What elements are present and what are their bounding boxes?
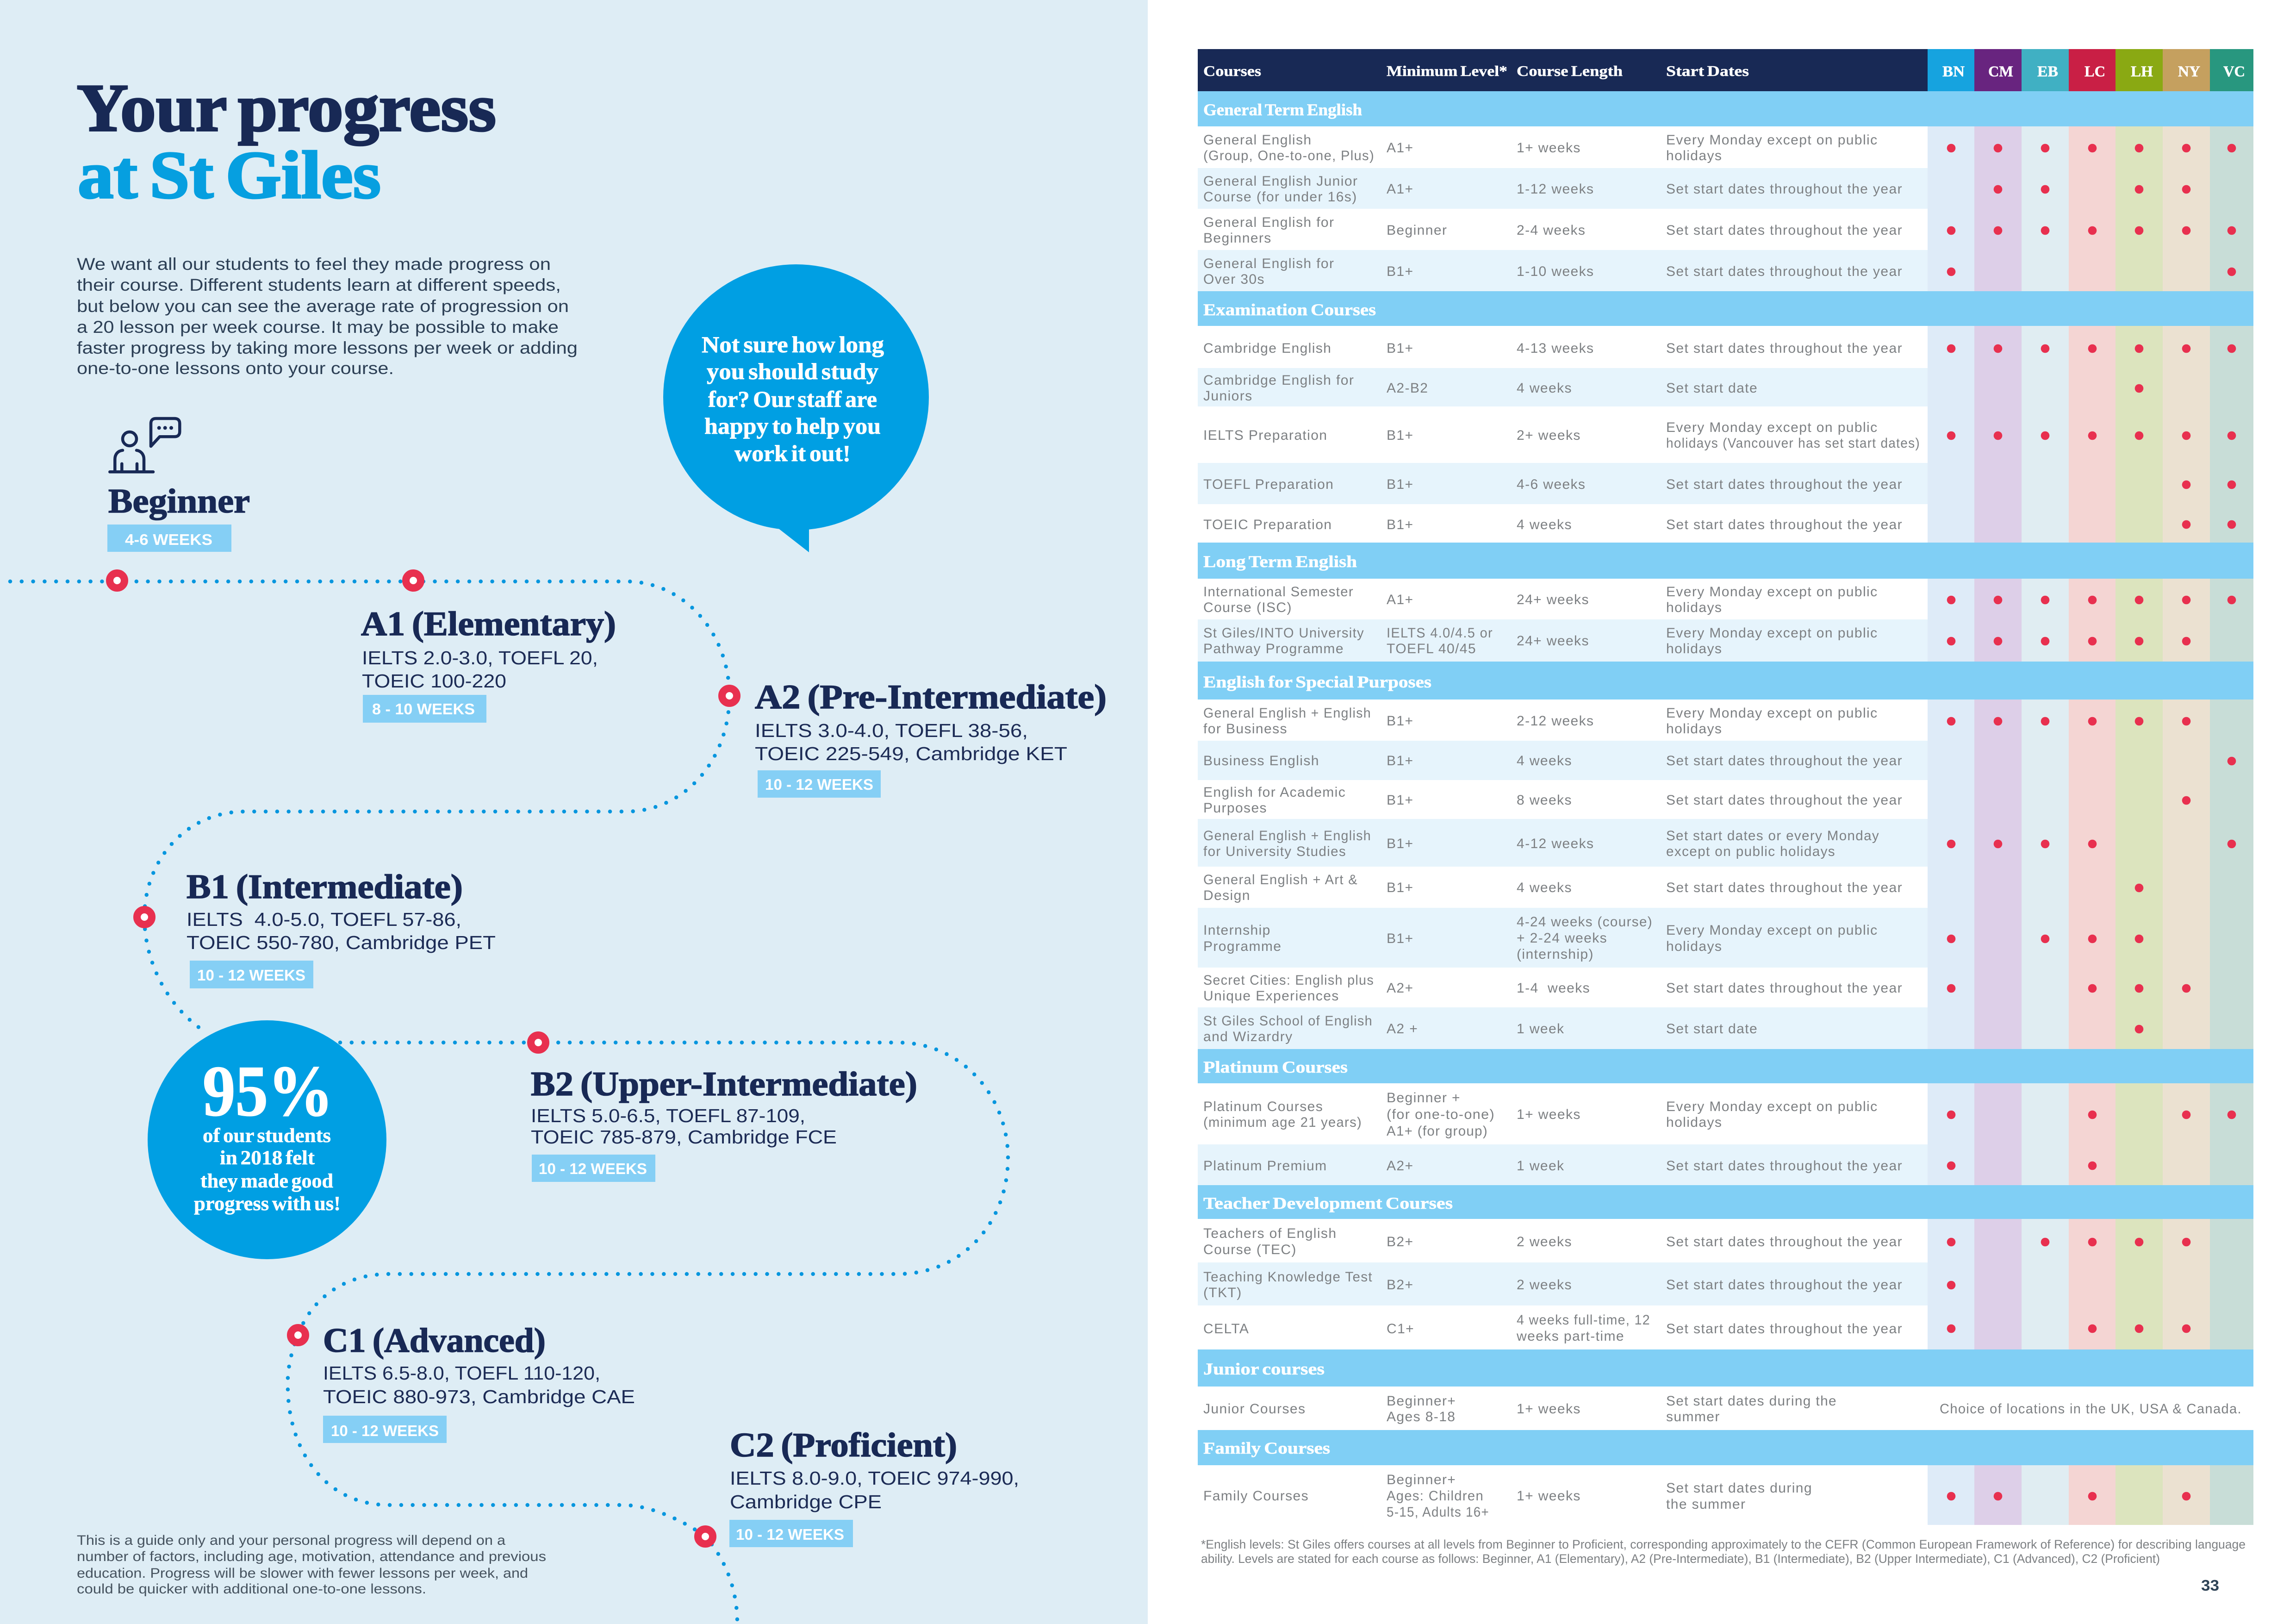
row: General English + English for Business [1198, 700, 2190, 741]
row: General English + Art & Design [1198, 867, 2143, 908]
row: Family Courses: the summer [1666, 1497, 1746, 1512]
table header: VC [2223, 63, 2245, 80]
section band: Junior courses: Junior courses [1203, 1360, 1325, 1378]
row: Internship Programme: + 2-24 weeks [1517, 931, 1607, 946]
level: A1 Elementary: 8 - 10 WEEKS [372, 700, 475, 718]
row: Internship Programme: B1+ [1387, 931, 1413, 946]
level: A1 Elementary: IELTS 2.0-3.0, TOEFL 20, [362, 647, 598, 668]
progress path: dotted line [10, 581, 1008, 1623]
level: C2 Proficient: Cambridge CPE [730, 1491, 882, 1512]
row: General English + English for University Studies: General English + English [1203, 828, 1371, 843]
stat circle: 95%: 95% [203, 1051, 333, 1131]
row: General English Junior Course: Set start dates throughout the year [1666, 181, 1903, 197]
row: General English: A1+ [1387, 140, 1413, 156]
row: TOEIC Preparation [1198, 504, 2236, 543]
row: General English + English for University Studies: B1+ [1387, 836, 1413, 851]
row: General English for Over 30s: Set start dates throughout the year [1666, 264, 1903, 279]
row: General English + English for University Studies [1198, 819, 2236, 867]
row: International Semester Course: 24+ weeks [1517, 592, 1589, 607]
row: TOEIC Preparation: B1+ [1387, 517, 1413, 532]
row: International Semester Course: International Semester [1203, 584, 1354, 600]
row: Internship Programme: 4-24 weeks (course) [1517, 914, 1653, 930]
row: Junior Courses: summer [1666, 1409, 1720, 1424]
row: Family Courses: Beginner+ [1387, 1472, 1456, 1487]
callout: speech bubble: Not sure how long [702, 331, 884, 357]
level: B1 Intermediate: IELTS 4.0-5.0, TOEFL 57-86, [187, 909, 461, 930]
row: Secret Cities [1198, 968, 2190, 1007]
row: General English Junior Course: Course (for under 16s) [1203, 189, 1357, 205]
row: St Giles School of English and Wizardry: St Giles School of English [1203, 1013, 1373, 1029]
stat circle: 95%: of our students [203, 1125, 331, 1147]
row: CELTA [1198, 1305, 2190, 1349]
row: St Giles School of English and Wizardry: and Wizardry [1203, 1029, 1293, 1044]
table header: LC [2084, 63, 2105, 80]
section band: English for Special Purposes [1198, 662, 2253, 700]
row: IELTS Preparation: 2+ weeks [1517, 428, 1581, 443]
row: Secret Cities: Set start dates throughout the year [1666, 981, 1903, 996]
row: Teaching Knowledge Test: (TKT) [1203, 1285, 1242, 1300]
row: TOEFL Preparation: B1+ [1387, 477, 1413, 492]
row: St Giles/INTO University Pathway Programme: 24+ weeks [1517, 633, 1589, 649]
row: General English for Beginners: 2-4 weeks [1517, 223, 1586, 238]
row: General English + English for Business: B1+ [1387, 713, 1413, 729]
row: TOEIC Preparation: TOEIC Preparation [1203, 517, 1332, 532]
level: C1 Advanced: TOEIC 880-973, Cambridge CAE [323, 1386, 635, 1407]
row: General English + English for Business: for Business [1203, 721, 1288, 737]
intro paragraph: but below you can see the average rate of progression on [77, 297, 569, 316]
table header: Courses [1203, 62, 1261, 79]
row: International Semester Course: Course (ISC) [1203, 600, 1292, 615]
row: Teaching Knowledge Test [1198, 1262, 1955, 1305]
callout: speech bubble: you should study [707, 358, 878, 384]
table header: EB [2037, 63, 2058, 80]
level: A2 Pre-Intermediate: TOEIC 225-549, Cambridge KET [755, 743, 1067, 764]
row: Platinum Courses: A1+ (for group) [1387, 1124, 1488, 1139]
title [77, 70, 496, 212]
panel: your progress at St Giles [0, 0, 1148, 1624]
intro paragraph: their course. Different students learn at different speeds, [77, 275, 561, 294]
row: Teachers of English Course: Course (TEC) [1203, 1242, 1297, 1257]
level: B2 Upper-Intermediate: B2 (Upper-Intermediate) [531, 1065, 917, 1103]
row: General English + English for University Studies: Set start dates or every Monday [1666, 828, 1879, 843]
row: TOEFL Preparation [1198, 463, 2236, 504]
row: English for Academic Purposes: 8 weeks [1517, 793, 1572, 808]
row: Family Courses: Family Courses [1203, 1488, 1309, 1504]
level: C2 Proficient [698, 1426, 1019, 1547]
level: B1 Intermediate: 10 - 12 WEEKS [197, 967, 305, 984]
row: General English for Over 30s: 1-10 weeks [1517, 264, 1594, 279]
row: General English for Over 30s: Over 30s [1203, 272, 1265, 287]
level: B2 Upper-Intermediate: 10 - 12 WEEKS [539, 1160, 647, 1177]
row: Platinum Courses: (minimum age 21 years) [1203, 1115, 1362, 1130]
callout: speech bubble: for? Our staff are [708, 386, 877, 412]
row: Cambridge English: Cambridge English [1203, 341, 1332, 356]
level: C1 Advanced: IELTS 6.5-8.0, TOEFL 110-120, [323, 1362, 600, 1384]
row: Teaching Knowledge Test: Set start dates throughout the year [1666, 1277, 1903, 1293]
table header: Course Length [1517, 62, 1623, 79]
row: St Giles School of English and Wizardry [1198, 1007, 2143, 1049]
row: English for Academic Purposes: B1+ [1387, 793, 1413, 808]
row: General English + Art & Design: General English + Art & [1203, 872, 1358, 887]
row: TOEFL Preparation: Set start dates throughout the year [1666, 477, 1903, 492]
row: General English for Beginners: General English for [1203, 215, 1334, 230]
level: B1 Intermediate [137, 868, 496, 988]
row: Cambridge English: 4-13 weeks [1517, 341, 1594, 356]
row: Business English: Business English [1203, 753, 1319, 768]
row: Teachers of English Course: 2 weeks [1517, 1234, 1572, 1249]
section band: General Term English: General Term English [1203, 100, 1362, 119]
row: General English + English for Business: holidays [1666, 721, 1722, 737]
row: Platinum Courses [1198, 1083, 2236, 1144]
row: International Semester Course [1198, 579, 2236, 619]
row: Cambridge English for Juniors: 4 weeks [1517, 381, 1572, 396]
row: St Giles/INTO University Pathway Programme: TOEFL 40/45 [1387, 641, 1476, 656]
level: A2 Pre-Intermediate: A2 (Pre-Intermediate) [755, 678, 1107, 716]
row: International Semester Course: A1+ [1387, 592, 1413, 607]
table header: Start Dates [1666, 62, 1749, 79]
table header: CM [1988, 63, 2013, 80]
row: Internship Programme: Every Monday except on public [1666, 923, 1878, 938]
row: English for Academic Purposes: Set start dates throughout the year [1666, 793, 1903, 808]
stat circle: 95%: progress with us! [194, 1193, 341, 1215]
row: Junior Courses: Beginner+ [1387, 1393, 1456, 1409]
row: General English + Art & Design: B1+ [1387, 880, 1413, 895]
row: General English + Art & Design: Design [1203, 888, 1251, 903]
row: Teachers of English Course [1198, 1219, 2190, 1262]
section band: Teacher Development Courses: Teacher Development Courses [1203, 1194, 1453, 1212]
level: Beginner [107, 482, 250, 588]
row: TOEFL Preparation: TOEFL Preparation [1203, 477, 1334, 492]
row: General English for Over 30s [1198, 250, 2236, 291]
level: A1 Elementary: A1 (Elementary) [361, 605, 616, 643]
row: Internship Programme: Programme [1203, 939, 1282, 954]
section band: Family Courses [1198, 1430, 2253, 1465]
title: Your progress [77, 70, 496, 145]
row: CELTA: CELTA [1203, 1321, 1249, 1337]
row: Junior Courses: Set start dates during the [1666, 1393, 1837, 1409]
row: Cambridge English: Set start dates throughout the year [1666, 341, 1903, 356]
row: Platinum Premium [1198, 1144, 2097, 1185]
row: St Giles/INTO University Pathway Programme: Pathway Programme [1203, 641, 1344, 656]
row: Internship Programme: (internship) [1517, 947, 1594, 962]
row: TOEFL Preparation: 4-6 weeks [1517, 477, 1586, 492]
intro paragraph: We want all our students to feel they made progress on [77, 255, 551, 274]
row: General English Junior Course [1198, 168, 2190, 209]
row: Internship Programme [1198, 908, 2143, 968]
level: C1 Advanced [291, 1322, 635, 1443]
row: Secret Cities: Secret Cities: English plus [1203, 973, 1374, 988]
level: C1 Advanced: 10 - 12 WEEKS [331, 1422, 439, 1439]
row: Family Courses: Ages: Children [1387, 1488, 1484, 1504]
footnote: English levels: *English levels: St Giles offers courses at all levels from Beginner to Proficient, corresponding approximately to the CEFR (Common European Framework of Reference) for describing language [1201, 1537, 2246, 1551]
page number: 33 [2201, 1577, 2219, 1594]
row: Secret Cities: Unique Experiences [1203, 988, 1339, 1004]
row: Internship Programme: Internship [1203, 923, 1271, 938]
row: General English + Art & Design: Set start dates throughout the year [1666, 880, 1903, 895]
level: Beginner: Beginner [108, 482, 250, 520]
row: Platinum Courses: 1+ weeks [1517, 1107, 1581, 1122]
stat circle: 95% [148, 1020, 386, 1259]
level: C2 Proficient: 10 - 12 WEEKS [736, 1526, 844, 1543]
row: CELTA: C1+ [1387, 1321, 1414, 1337]
location column tints [1928, 91, 2253, 1525]
table header: LH [2131, 63, 2153, 80]
row: St Giles School of English and Wizardry: 1 week [1517, 1021, 1564, 1037]
level: A1 Elementary: TOEIC 100-220 [362, 670, 506, 692]
row: St Giles/INTO University Pathway Programme: St Giles/INTO University [1203, 625, 1364, 641]
section band: General Term English [1198, 91, 2253, 126]
row: General English [1198, 126, 2236, 168]
row: St Giles School of English and Wizardry: Set start date [1666, 1021, 1758, 1037]
row: General English + English for University Studies: except on public holidays [1666, 844, 1836, 859]
section band: Platinum Courses: Platinum Courses [1203, 1058, 1348, 1076]
row: Secret Cities: A2+ [1387, 981, 1413, 996]
row: Cambridge English for Juniors: A2-B2 [1387, 381, 1428, 396]
intro paragraph: one-to-one lessons onto your course. [77, 359, 394, 378]
level: B1 Intermediate: B1 (Intermediate) [187, 868, 463, 906]
row: Platinum Courses: Beginner + [1387, 1090, 1461, 1106]
intro paragraph: faster progress by taking more lessons per week or adding [77, 338, 578, 357]
title: at St Giles [78, 137, 381, 212]
row: TOEIC Preparation: 4 weeks [1517, 517, 1572, 532]
level: C1 Advanced: C1 (Advanced) [323, 1322, 546, 1360]
row: Teaching Knowledge Test: Teaching Knowledge Test [1203, 1269, 1373, 1285]
level: A2 Pre-Intermediate: IELTS 3.0-4.0, TOEFL 38-56, [755, 720, 1028, 741]
row: General English Junior Course: General English Junior [1203, 174, 1358, 189]
row: General English + English for Business: 2-12 weeks [1517, 713, 1594, 729]
section band: Examination Courses [1198, 291, 2253, 326]
row: Junior Courses: 1+ weeks [1517, 1401, 1581, 1417]
row: General English for Beginners: Set start dates throughout the year [1666, 223, 1903, 238]
row: General English: holidays [1666, 148, 1722, 163]
row: Internship Programme: holidays [1666, 939, 1722, 954]
row: Platinum Premium: Platinum Premium [1203, 1158, 1327, 1174]
row: Junior Courses: Ages 8-18 [1387, 1409, 1456, 1424]
row: St Giles School of English and Wizardry: A2 + [1387, 1021, 1418, 1037]
row: General English for Beginners: Beginner [1387, 223, 1447, 238]
row: St Giles/INTO University Pathway Programme [1198, 619, 2190, 662]
panel: course table [1198, 49, 2253, 1594]
row: Platinum Premium: Set start dates throughout the year [1666, 1158, 1903, 1174]
level: B2 Upper-Intermediate: IELTS 5.0-6.5, TOEFL 87-109, [531, 1105, 805, 1126]
row: General English for Beginners: Beginners [1203, 231, 1272, 246]
icon: person speaking [110, 418, 180, 472]
row: IELTS Preparation: IELTS Preparation [1203, 428, 1327, 443]
callout: speech bubble: happy to help you [704, 413, 881, 439]
row: General English for Beginners [1198, 209, 2236, 250]
section band: English for Special Purposes: English for Special Purposes [1203, 673, 1431, 691]
row: CELTA: Set start dates throughout the year [1666, 1321, 1903, 1337]
row: Platinum Premium: 1 week [1517, 1158, 1564, 1174]
level: B2 Upper-Intermediate [531, 1035, 917, 1182]
section band: Junior courses [1198, 1349, 2253, 1387]
row: IELTS Preparation: B1+ [1387, 428, 1413, 443]
row: General English: 1+ weeks [1517, 140, 1581, 156]
section band: Family Courses: Family Courses [1203, 1439, 1330, 1457]
row: Family Courses [1198, 1465, 2190, 1525]
footnote: progress guide [77, 1533, 546, 1597]
level: C2 Proficient: IELTS 8.0-9.0, TOEIC 974-990, [730, 1468, 1019, 1489]
callout: speech bubble: work it out! [734, 440, 851, 466]
section band: Long Term English: Long Term English [1203, 552, 1357, 571]
row: International Semester Course: holidays [1666, 600, 1722, 615]
row: St Giles/INTO University Pathway Programme: IELTS 4.0/4.5 or [1387, 625, 1493, 641]
row: Cambridge English for Juniors: Cambridge English for [1203, 373, 1354, 388]
footnote: progress guide: number of factors, including age, motivation, attendance and previous [77, 1549, 546, 1564]
row: Platinum Premium: A2+ [1387, 1158, 1413, 1174]
row: General English Junior Course: 1-12 weeks [1517, 181, 1594, 197]
row: Cambridge English: B1+ [1387, 341, 1413, 356]
row: Teaching Knowledge Test: 2 weeks [1517, 1277, 1572, 1293]
footnote: English levels [1201, 1537, 2246, 1566]
level: A2 Pre-Intermediate [722, 678, 1107, 798]
level: C2 Proficient: C2 (Proficient) [730, 1426, 957, 1464]
row: Teachers of English Course: B2+ [1387, 1234, 1413, 1249]
row: Platinum Courses: (for one-to-one) [1387, 1107, 1495, 1122]
row: Business English [1198, 741, 2236, 780]
row: Platinum Courses: Every Monday except on public [1666, 1099, 1878, 1114]
row: Family Courses: 1+ weeks [1517, 1488, 1581, 1504]
table header [1198, 49, 2253, 91]
row: General English for Over 30s: B1+ [1387, 264, 1413, 279]
footnote: English levels: ability. Levels are stated for each course as follows: Beginner, A1 (Elementary), A2 (Pre-Intermediate), B1 (Intermediate), B2 (Upper Intermediate), C1 (Advanced), C2 (Proficient) [1201, 1552, 2160, 1566]
row: General English + Art & Design: 4 weeks [1517, 880, 1572, 895]
level: B1 Intermediate: TOEIC 550-780, Cambridge PET [187, 932, 496, 953]
row: Business English: B1+ [1387, 753, 1413, 768]
row: Business English: 4 weeks [1517, 753, 1572, 768]
row: Junior Courses: Junior Courses [1203, 1401, 1306, 1417]
row: St Giles/INTO University Pathway Programme: holidays [1666, 641, 1722, 656]
row: Teaching Knowledge Test: B2+ [1387, 1277, 1413, 1293]
row: IELTS Preparation [1198, 406, 2236, 463]
row: Junior Courses [1198, 1387, 2253, 1430]
row: General English: (Group, One-to-one, Plus) [1203, 148, 1375, 163]
row: English for Academic Purposes: English for Academic [1203, 785, 1346, 800]
row: English for Academic Purposes: Purposes [1203, 800, 1267, 816]
section band: Long Term English [1198, 543, 2253, 579]
table header: BN [1942, 63, 1965, 80]
level: Beginner: 4-6 WEEKS [125, 531, 212, 548]
row: General English: General English [1203, 132, 1312, 148]
row: International Semester Course: Every Monday except on public [1666, 584, 1878, 600]
row: Teachers of English Course: Teachers of English [1203, 1226, 1337, 1241]
footnote: progress guide: education. Progress will be slower with fewer lessons per week, and [77, 1566, 528, 1581]
section band: Examination Courses: Examination Courses [1203, 300, 1376, 319]
level: A2 Pre-Intermediate: 10 - 12 WEEKS [765, 776, 873, 793]
row: CELTA: 4 weeks full-time, 12 [1517, 1312, 1650, 1328]
callout: speech bubble [663, 264, 929, 552]
row: IELTS Preparation: Every Monday except on public [1666, 420, 1878, 435]
row: General English + English for Business: General English + English [1203, 706, 1371, 721]
row: Cambridge English [1198, 326, 2236, 368]
row: General English: Every Monday except on public [1666, 132, 1878, 148]
row: General English + English for University Studies: 4-12 weeks [1517, 836, 1594, 851]
level: A1 Elementary [361, 573, 616, 723]
row: Cambridge English for Juniors: Set start date [1666, 381, 1758, 396]
row: Teachers of English Course: Set start dates throughout the year [1666, 1234, 1903, 1249]
row: IELTS Preparation: holidays (Vancouver has set start dates) [1666, 436, 1920, 451]
section band: Platinum Courses [1198, 1049, 2253, 1083]
row: Business English: Set start dates throughout the year [1666, 753, 1903, 768]
row: Family Courses: 5-15, Adults 16+ [1387, 1505, 1489, 1520]
row: St Giles/INTO University Pathway Programme: Every Monday except on public [1666, 625, 1878, 641]
row: General English + English for Business: Every Monday except on public [1666, 706, 1878, 721]
row: Junior Courses: Choice of locations in the UK, USA & Canada. [1940, 1401, 2242, 1417]
row: Secret Cities: 1-4 weeks [1517, 981, 1590, 996]
row: TOEIC Preparation: Set start dates throughout the year [1666, 517, 1903, 532]
stat circle: 95%: they made good [200, 1170, 333, 1192]
footnote: progress guide: could be quicker with additional one-to-one lessons. [77, 1581, 426, 1597]
table header: Minimum Level* [1387, 62, 1507, 79]
level: B2 Upper-Intermediate: TOEIC 785-879, Cambridge FCE [531, 1126, 837, 1148]
stat circle: 95%: in 2018 felt [220, 1147, 315, 1169]
row: General English Junior Course: A1+ [1387, 181, 1413, 197]
table header: NY [2178, 63, 2200, 80]
footnote: progress guide: This is a guide only and your personal progress will depend on a [77, 1533, 505, 1548]
row: Family Courses: Set start dates during [1666, 1480, 1812, 1496]
row: CELTA: weeks part-time [1516, 1329, 1624, 1344]
section band: Teacher Development Courses [1198, 1185, 2253, 1219]
row: English for Academic Purposes [1198, 780, 2190, 819]
row: Platinum Courses: Platinum Courses [1203, 1099, 1323, 1114]
row: Platinum Courses: holidays [1666, 1115, 1722, 1130]
intro paragraph [77, 255, 578, 378]
row: General English for Over 30s: General English for [1203, 256, 1334, 271]
row: General English + English for University Studies: for University Studies [1203, 844, 1346, 859]
intro paragraph: a 20 lesson per week course. It may be possible to make [77, 318, 559, 337]
row: Cambridge English for Juniors: Juniors [1203, 388, 1253, 404]
row: Cambridge English for Juniors [1198, 368, 2143, 406]
